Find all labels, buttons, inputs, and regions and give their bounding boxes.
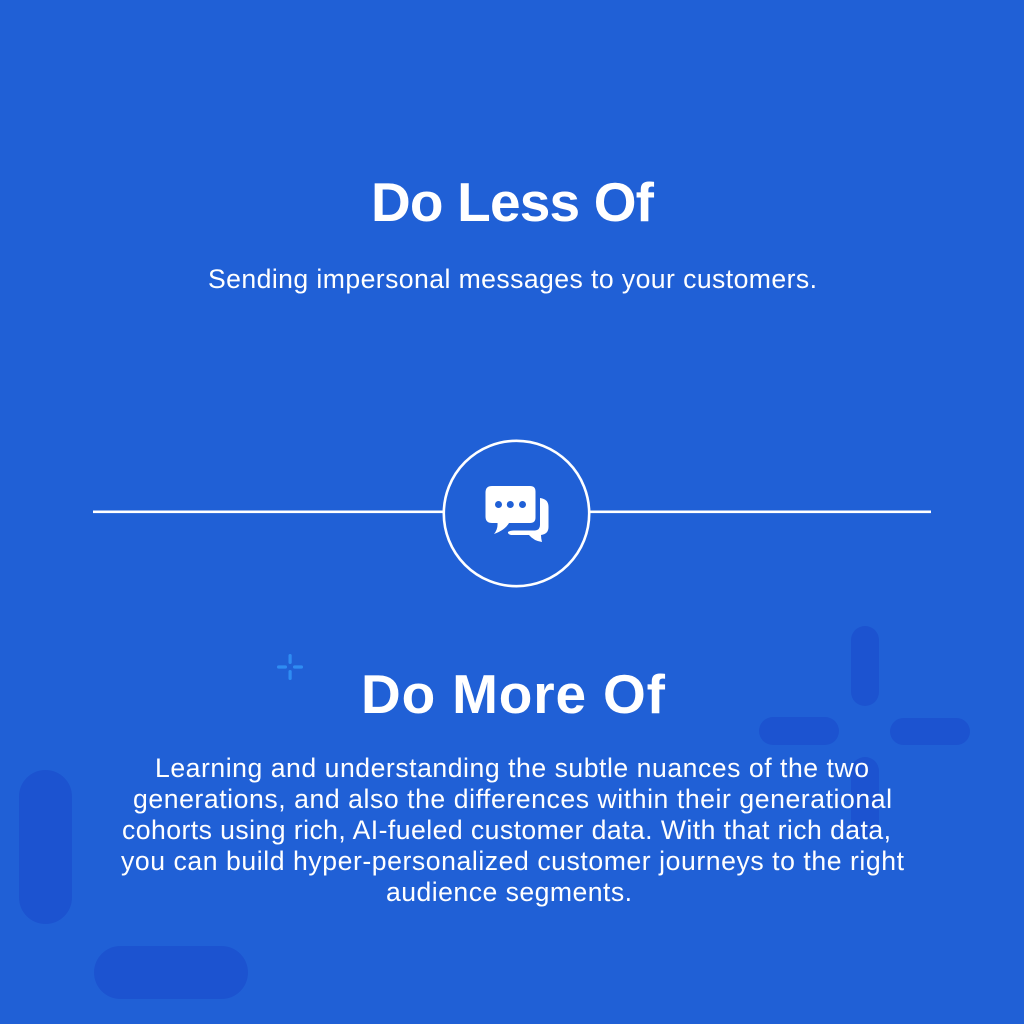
icon: chat bubbles bbox=[486, 486, 548, 542]
icon: small light blue crosshair sparkle bbox=[277, 654, 303, 680]
decorative background pills: right cross bbox=[759, 626, 970, 837]
divider with chat icon bbox=[93, 441, 931, 586]
text: Do More Of description: cohorts using rich, AI-fueled customer data. With that rich data, bbox=[122, 815, 891, 845]
text: Do More Of description bbox=[121, 753, 905, 907]
text: Do Less Of description: Sending impersonal messages to your customers. bbox=[208, 264, 817, 294]
text: Do More Of description: audience segments. bbox=[386, 877, 632, 907]
icon ring bbox=[444, 441, 589, 586]
divider line: left bbox=[93, 510, 444, 513]
heading: Do Less Of: Do Less Of bbox=[371, 171, 655, 233]
divider line: right bbox=[589, 510, 931, 513]
text: Do More Of description: you can build hyper-personalized customer journeys to the right bbox=[121, 846, 905, 876]
text: Do More Of description: generations, and also the differences within their generational bbox=[133, 784, 892, 814]
heading: Do More Of: Do More Of bbox=[361, 663, 666, 725]
decorative background pills: lower left bbox=[19, 770, 248, 999]
text: Do More Of description: Learning and understanding the subtle nuances of the two bbox=[155, 753, 869, 783]
